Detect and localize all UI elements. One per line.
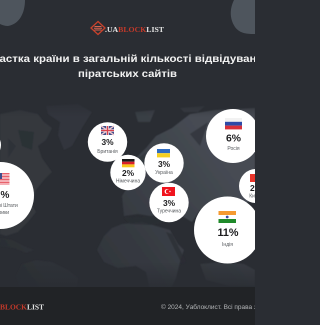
icon: Turkish flag: [162, 187, 175, 196]
circle: Ukraine: Україна: [155, 170, 173, 176]
circle: Germany: [110, 155, 146, 190]
icon: Ukrainian flag: [157, 149, 170, 157]
circle: China: [239, 169, 273, 203]
icon: Chinese flag: [250, 174, 263, 182]
icon: German flag: [122, 159, 134, 167]
circle: India: [194, 196, 261, 264]
circle: Turkey: Туреччина: [157, 209, 181, 215]
icon: logo diamond: [91, 22, 105, 34]
footer: [0, 287, 283, 325]
circle: Germany: 2%: [122, 168, 135, 178]
background: [0, 0, 255, 325]
circle: Britain: 3%: [101, 137, 114, 147]
circle: Ukraine: [144, 143, 184, 183]
icon: Indian flag: [218, 211, 236, 223]
circle: unlabeled edge marker: [0, 131, 1, 159]
footer logo: BLOCKLIST: [0, 304, 44, 312]
circle: Russia: Росія: [227, 146, 240, 152]
decorative blob: top left: [0, 0, 25, 26]
circle: United States: %: [1, 190, 10, 201]
circle: Turkey: [149, 183, 189, 222]
logo: [91, 22, 164, 34]
title: піратських сайтів: [78, 69, 177, 80]
logo wordmark: .UABLOCKLIST: [105, 25, 164, 34]
circle: India: 11%: [217, 227, 239, 239]
circle: Russia: [206, 109, 260, 163]
circle: Russia: 6%: [226, 134, 241, 144]
circle: Britain: [88, 122, 127, 162]
icon: Russian flag: [225, 118, 242, 129]
world map: [0, 104, 255, 290]
circle: Turkey: 3%: [163, 198, 176, 208]
circle: Germany: Німеччина: [116, 178, 140, 184]
circle: Britain: Британія: [97, 149, 118, 155]
circle: India: Індія: [222, 242, 233, 248]
decorative blob: top right: [231, 0, 255, 34]
circle: United States: [0, 162, 34, 229]
icon: UK flag: [101, 126, 114, 135]
title: [0, 54, 264, 80]
map seas: [8, 122, 208, 264]
circle: Ukraine: 3%: [158, 159, 171, 169]
icon: US flag: [0, 173, 10, 185]
